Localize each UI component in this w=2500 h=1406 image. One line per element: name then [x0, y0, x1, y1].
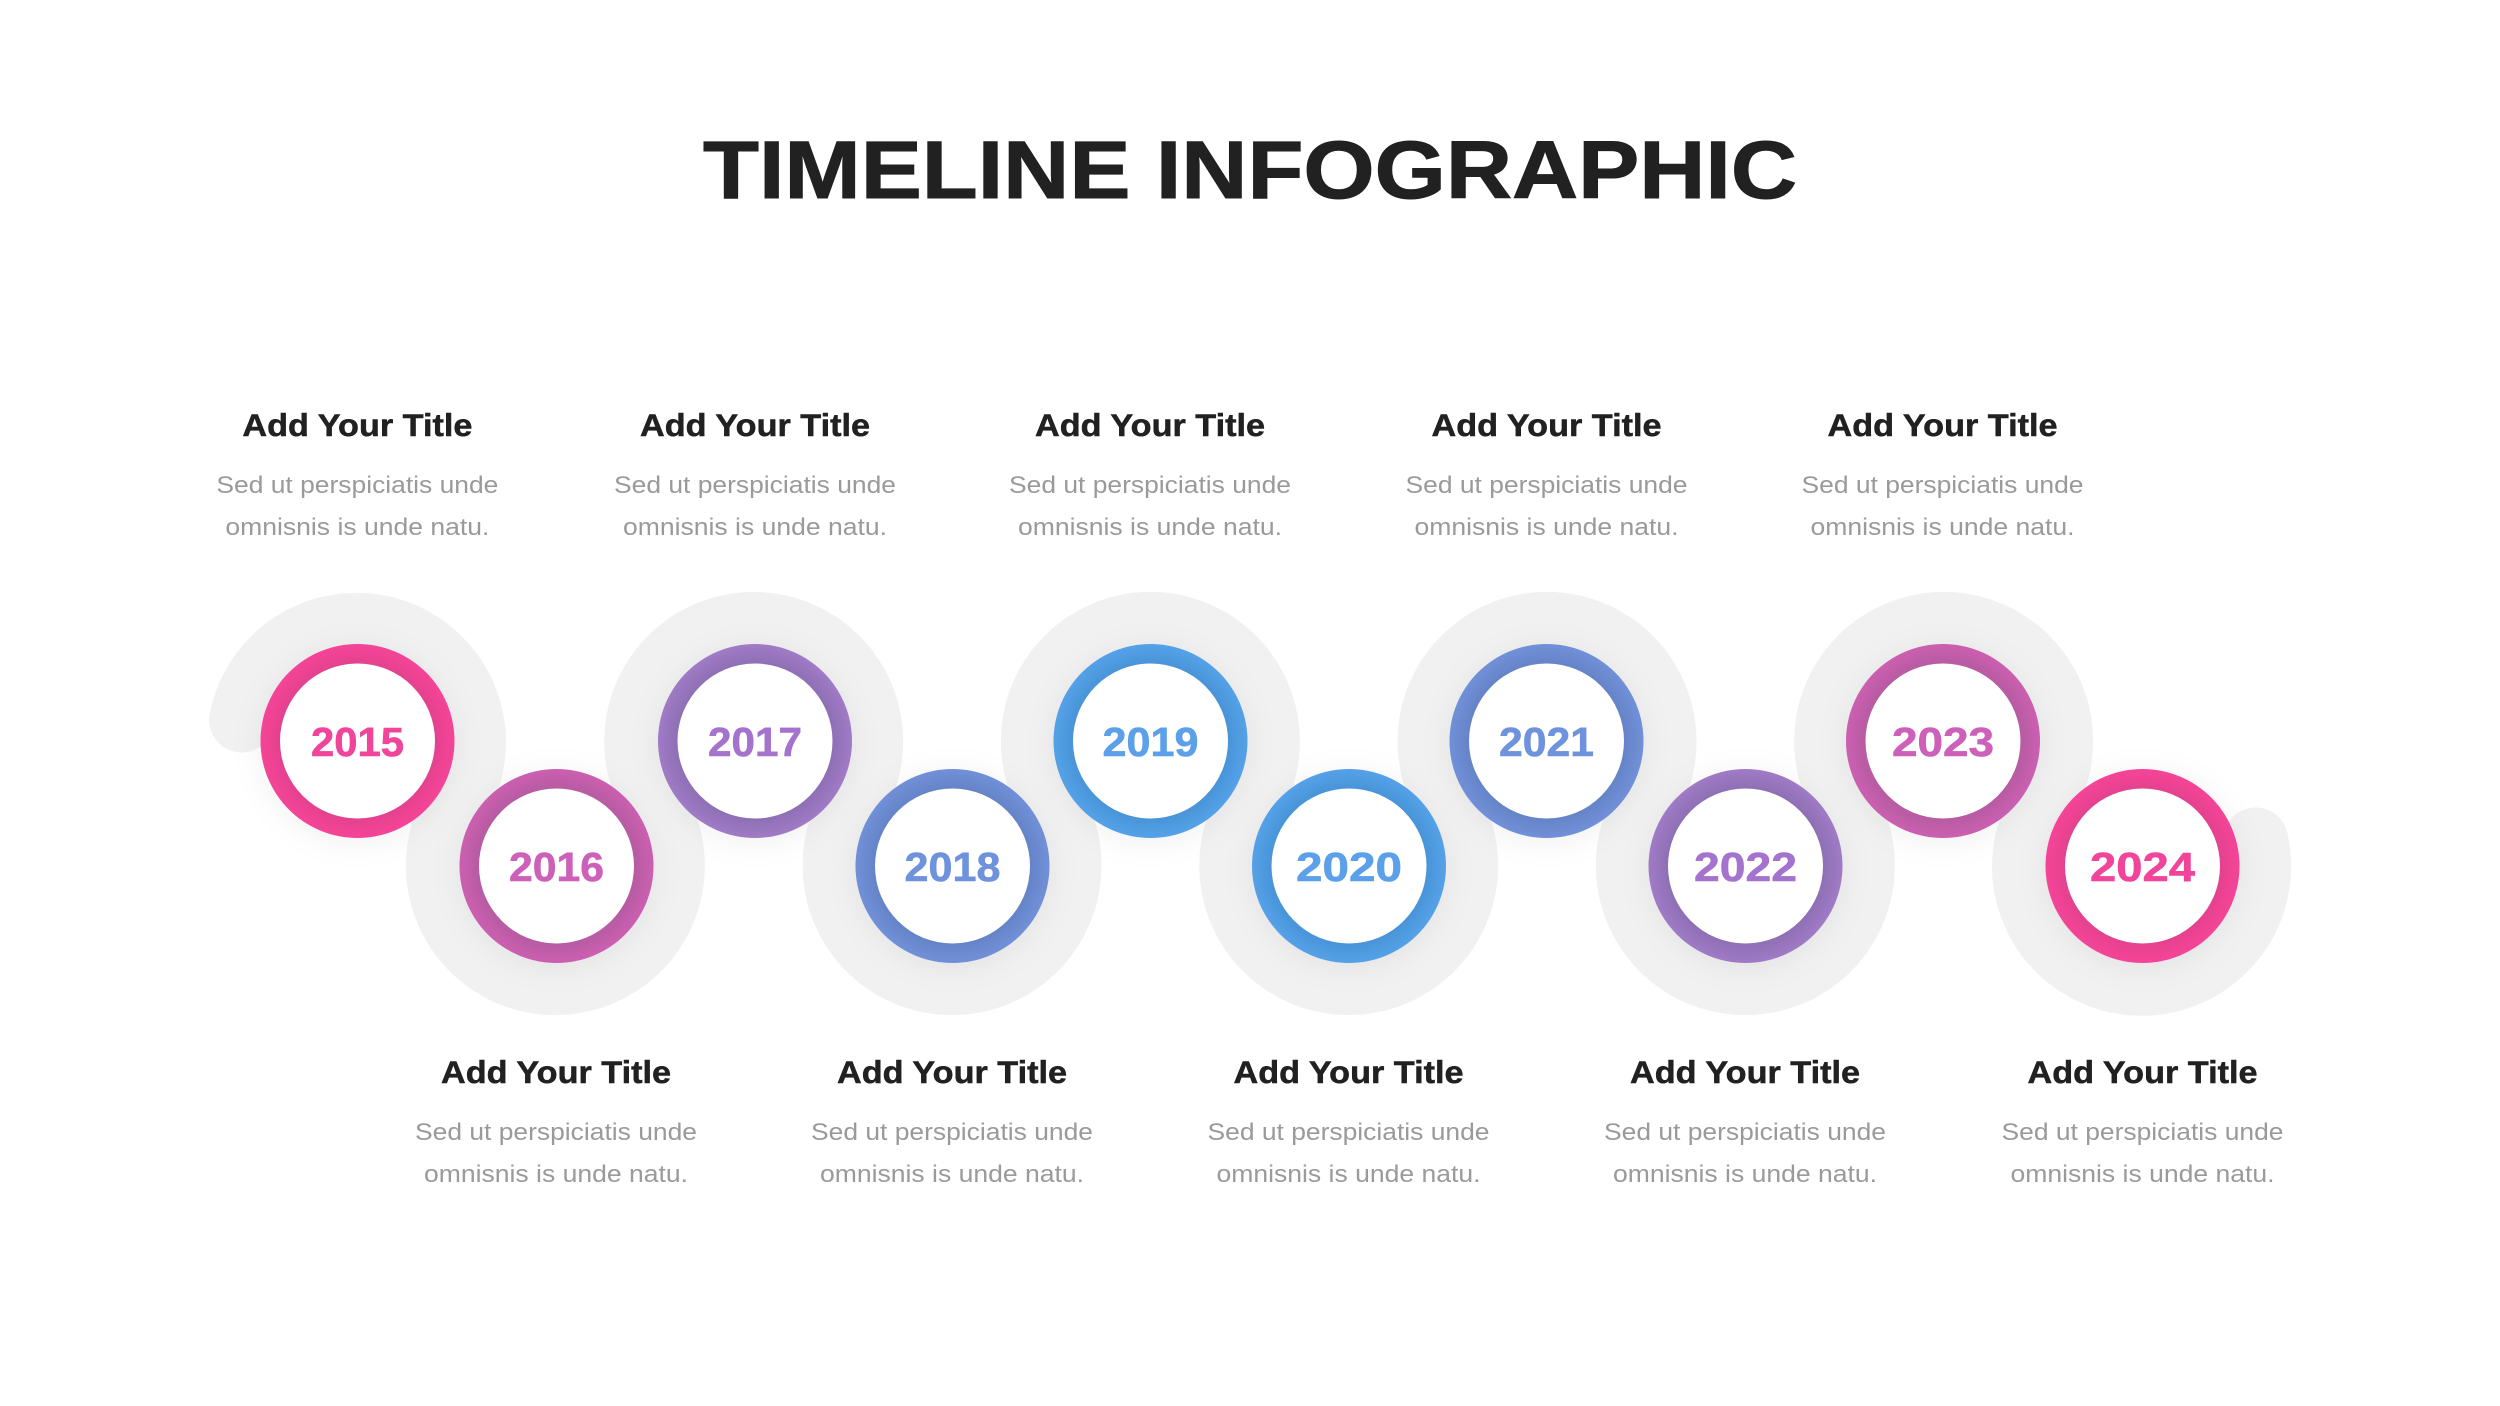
year badge 2021: [1450, 644, 1644, 838]
description 2015: [216, 472, 498, 541]
year badge 2015: [260, 644, 454, 838]
description 2020: Sed ut perspiciatis unde: [1208, 1119, 1490, 1146]
title: TIMELINE INFOGRAPHIC: [703, 125, 1797, 216]
year badge 2019: [1054, 644, 1248, 838]
year badge 2023: [1846, 644, 2040, 838]
milestone 2017: [614, 407, 896, 838]
year badge 2020: [1252, 769, 1446, 963]
year badge 2018: [856, 769, 1050, 963]
description 2018: Sed ut perspiciatis unde: [811, 1119, 1093, 1146]
heading 2015: Add Your Title: [242, 407, 472, 443]
milestone 2024: [2002, 769, 2284, 1188]
year badge 2022: [1648, 769, 1842, 963]
description 2018: [811, 1119, 1093, 1188]
description 2017: [614, 472, 896, 541]
description 2015: omnisnis is unde natu.: [225, 514, 489, 541]
year badge 2016: 2016: [509, 844, 604, 890]
heading 2022: Add Your Title: [1630, 1054, 1860, 1090]
milestone 2022: [1604, 769, 1886, 1188]
year badge 2015: 2015: [311, 719, 404, 765]
year badge 2024: [2046, 769, 2240, 963]
milestone 2018: [811, 769, 1093, 1188]
year badge 2023: 2023: [1892, 719, 1994, 765]
wavy grey timeline track: [242, 624, 2259, 983]
milestone 2016: [415, 769, 697, 1188]
description 2021: Sed ut perspiciatis unde: [1406, 472, 1688, 499]
description 2024: [2002, 1119, 2284, 1188]
description 2019: [1009, 472, 1291, 541]
year badge 2020: 2020: [1296, 844, 1402, 890]
description 2021: omnisnis is unde natu.: [1414, 514, 1678, 541]
milestone 2020: [1208, 769, 1490, 1188]
description 2017: Sed ut perspiciatis unde: [614, 472, 896, 499]
description 2017: omnisnis is unde natu.: [623, 514, 887, 541]
heading 2017: Add Your Title: [640, 407, 870, 443]
year badge 2021: 2021: [1499, 719, 1594, 765]
description 2021: [1406, 472, 1688, 541]
description 2024: Sed ut perspiciatis unde: [2002, 1119, 2284, 1146]
year badge 2024: 2024: [2090, 844, 2195, 890]
description 2023: Sed ut perspiciatis unde: [1802, 472, 2084, 499]
description 2023: omnisnis is unde natu.: [1810, 514, 2074, 541]
milestone 2019: [1009, 407, 1291, 838]
year badge 2017: 2017: [708, 719, 802, 765]
year badge 2019: 2019: [1102, 719, 1198, 765]
year badge 2016: [460, 769, 654, 963]
description 2019: Sed ut perspiciatis unde: [1009, 472, 1291, 499]
year badge 2018: 2018: [904, 844, 1000, 890]
heading 2024: Add Your Title: [2028, 1054, 2258, 1090]
year badge 2022: 2022: [1694, 844, 1797, 890]
milestone 2015: [216, 407, 498, 838]
description 2016: Sed ut perspiciatis unde: [415, 1119, 697, 1146]
heading 2019: Add Your Title: [1035, 407, 1265, 443]
description 2018: omnisnis is unde natu.: [820, 1161, 1084, 1188]
description 2020: omnisnis is unde natu.: [1216, 1161, 1480, 1188]
year badge 2017: [658, 644, 852, 838]
heading 2016: Add Your Title: [441, 1054, 671, 1090]
description 2015: Sed ut perspiciatis unde: [216, 472, 498, 499]
milestone 2023: [1802, 407, 2084, 838]
description 2016: [415, 1119, 697, 1188]
description 2022: omnisnis is unde natu.: [1613, 1161, 1877, 1188]
heading 2021: Add Your Title: [1432, 407, 1662, 443]
heading 2020: Add Your Title: [1234, 1054, 1464, 1090]
description 2024: omnisnis is unde natu.: [2010, 1161, 2274, 1188]
description 2016: omnisnis is unde natu.: [424, 1161, 688, 1188]
description 2023: [1802, 472, 2084, 541]
description 2022: [1604, 1119, 1886, 1188]
description 2019: omnisnis is unde natu.: [1018, 514, 1282, 541]
heading 2023: Add Your Title: [1828, 407, 2058, 443]
description 2022: Sed ut perspiciatis unde: [1604, 1119, 1886, 1146]
milestone 2021: [1406, 407, 1688, 838]
heading 2018: Add Your Title: [837, 1054, 1067, 1090]
description 2020: [1208, 1119, 1490, 1188]
